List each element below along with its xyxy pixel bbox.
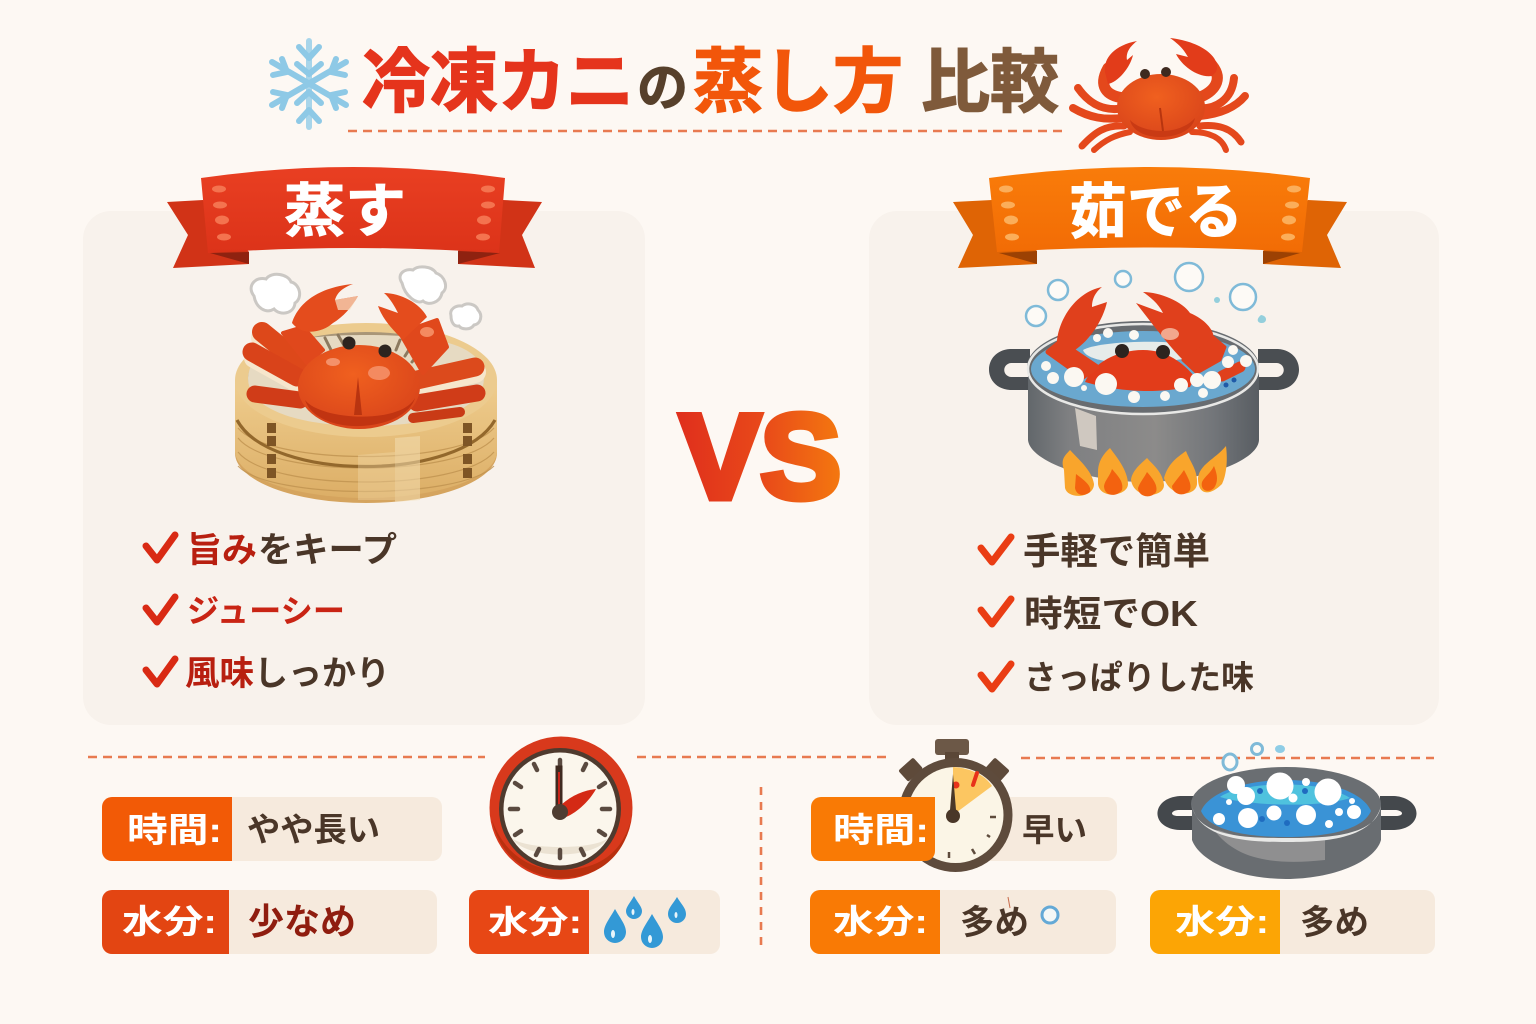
bar: 時間 やや長い: やや長い	[247, 811, 380, 848]
icon: title crab	[1073, 38, 1245, 150]
pot body	[1028, 367, 1259, 482]
crab shell	[298, 345, 420, 429]
bar: 水分 水滴: 水分:	[488, 904, 582, 940]
panel: 蒸す	[83, 167, 645, 725]
icon: stopwatch	[898, 739, 1012, 872]
ribbon banner: 茹でる: 茹でる	[1069, 179, 1243, 246]
crab arms and claws	[283, 327, 323, 363]
pot rim and water	[1027, 321, 1259, 413]
panel: 茹でる	[869, 167, 1439, 725]
check item 1: をキープ	[258, 531, 397, 570]
ribbon banner: 蒸す: 蒸す	[284, 179, 406, 244]
check item 3	[146, 655, 390, 693]
rising bubbles	[1026, 263, 1256, 326]
check item 3: さっぱりした味	[1024, 659, 1254, 696]
icon: boiling pot small	[1158, 744, 1416, 879]
icon: snowflake	[272, 41, 346, 127]
check item 3: しっかり	[254, 655, 390, 693]
bar: 時間 早い: 時間:	[833, 812, 929, 850]
title block	[272, 38, 1245, 150]
title dashed underline	[348, 130, 1064, 132]
icon: small bubble	[1042, 907, 1058, 923]
flames	[1063, 446, 1227, 496]
check item 1: 手軽で簡単	[1023, 531, 1210, 572]
bar: 水分 多め (orange): 水分:	[833, 903, 928, 940]
bar: 水分 多め (orange)	[810, 890, 1116, 954]
bar: 時間 やや長い: 時間:	[127, 812, 222, 850]
bar: 水分 水滴	[469, 890, 720, 954]
icon: crab in boiling pot	[989, 263, 1299, 496]
bar: 水分 少なめ: 水分:	[122, 903, 217, 940]
check item 1	[146, 531, 397, 570]
ribbon banner: 蒸す	[167, 167, 542, 268]
ribbon banner: 茹でる	[953, 167, 1347, 268]
bar: 水分 多め (amber): 水分:	[1175, 903, 1269, 940]
check item 1: 旨み	[187, 531, 257, 570]
bar: 水分 多め (orange): 多め	[960, 904, 1029, 942]
title text: 冷凍カニ: 冷凍カニ	[362, 43, 634, 121]
icon: water drops	[604, 896, 686, 948]
boiled crab	[1085, 350, 1195, 391]
pot handles	[989, 349, 1030, 390]
benefits list: 蒸す	[146, 531, 397, 693]
benefits list: 茹でる	[981, 531, 1254, 696]
title text: 比較: 比較	[921, 44, 1059, 121]
check item 2: 時短でOK	[1024, 593, 1198, 634]
VS text: VS	[680, 390, 841, 524]
check item 3: 風味	[185, 655, 254, 693]
icon: steamed crab in bamboo steamer	[235, 267, 497, 503]
title text: 蒸し方: 蒸し方	[693, 43, 903, 121]
bar: 時間 早い	[811, 739, 1117, 872]
title text: の: の	[637, 60, 688, 118]
crab legs	[252, 332, 477, 418]
bar: 水分 少なめ	[102, 890, 437, 954]
bar: 水分 多め (amber): 多め	[1300, 904, 1369, 942]
check item 2: ジューシー	[187, 593, 345, 629]
bar: 水分 少なめ: 少なめ	[248, 901, 356, 942]
steamer body	[235, 403, 497, 503]
panel background	[83, 211, 645, 725]
water bubbles	[1041, 328, 1252, 403]
steam clouds	[251, 267, 481, 329]
bar: 水分 多め (amber)	[1150, 890, 1435, 954]
bar: 時間 早い: 早い	[1022, 812, 1087, 848]
icon: wall clock	[490, 736, 632, 880]
bar: 時間 やや長い	[102, 797, 442, 861]
panel background	[869, 211, 1439, 725]
